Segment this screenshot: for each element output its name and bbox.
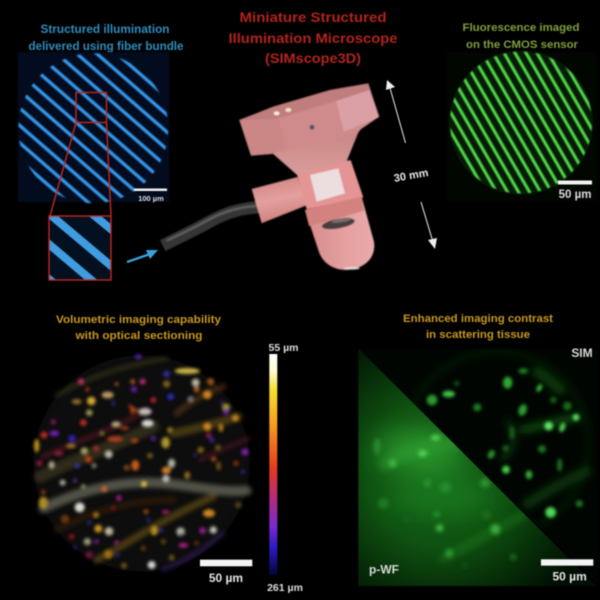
heading: structured illumination: delivered using fiber bundle [28,41,184,53]
arrow: up [386,80,406,143]
top flange: left cylinder [239,118,285,156]
arrow: down [421,202,437,249]
label: SIM: SIM [571,346,593,360]
side port [252,177,307,223]
panel: green fluorescence image [447,50,597,201]
dimension: 30 mm [386,80,437,249]
p-WF half [358,348,597,586]
scale bar: 50 µm: 50 µm [559,189,591,201]
dark window [321,216,356,231]
panel: blue structured illumination image [18,52,169,203]
scale bar: 100 µm [134,188,167,203]
heading: structured illumination: Structured illumination [40,24,170,36]
title: miniature structured illumination microscope: Miniature Structured [240,9,386,25]
funnel [272,130,359,175]
heading: fluorescence: on the CMOS sensor [466,39,579,51]
scale bar: 50 µm [541,559,593,584]
zoom callout: selection box and connecting lines [50,92,111,216]
scale bar: 50 µm [200,560,252,585]
title: miniature structured illumination microscope: Illumination Microscope [228,30,398,46]
heading: enhanced contrast: Enhanced imaging contrast [403,313,553,325]
SIM half [410,349,596,529]
microscope illustration [163,83,379,270]
panel: volumetric depth-coded image [33,354,252,585]
band [305,197,364,226]
title: miniature structured illumination microscope [228,9,398,66]
heading: volumetric imaging [56,314,222,342]
label: p-WF: p-WF [369,562,399,576]
scale bar: 100 µm: 100 µm [138,194,164,203]
panel: SIM versus p-WF comparison [358,346,598,586]
depth color bar [267,342,303,594]
label: 261 µm: 261 µm [267,582,303,594]
scale bar: 50 µm: 50 µm [553,570,587,584]
LED contacts [274,111,280,115]
heading: enhanced contrast [403,313,553,341]
heading: volumetric imaging: with optical sectioning [74,330,202,342]
label: 55 µm: 55 µm [269,342,298,354]
heading: fluorescence [462,22,580,51]
white sensor plate [310,168,345,202]
scale bar: 50 µm: 50 µm [209,571,243,585]
capsule tip [344,267,360,270]
stem [297,160,363,209]
top flange: right panel [336,90,379,132]
heading: fluorescence: Fluorescence imaged [462,22,580,34]
tissue disk [33,355,250,572]
heading: structured illumination [28,24,184,53]
scale bar: 50 µm [558,180,592,201]
fibers [40,358,248,570]
title: miniature structured illumination microscope: (SIMscope3D) [265,50,361,66]
lens dot [310,125,314,130]
fluorescent cells [34,354,249,569]
top flange: top face [239,83,369,120]
arrow: blue light into fiber [127,250,158,262]
top flange: base [239,83,379,156]
label: 30 mm [393,167,430,185]
lower capsule [305,197,374,270]
inset: magnified stripes [48,214,112,282]
heading: enhanced contrast: in scattering tissue [426,329,530,341]
heading: volumetric imaging: Volumetric imaging capability [56,314,222,326]
fiber bundle [163,206,258,246]
